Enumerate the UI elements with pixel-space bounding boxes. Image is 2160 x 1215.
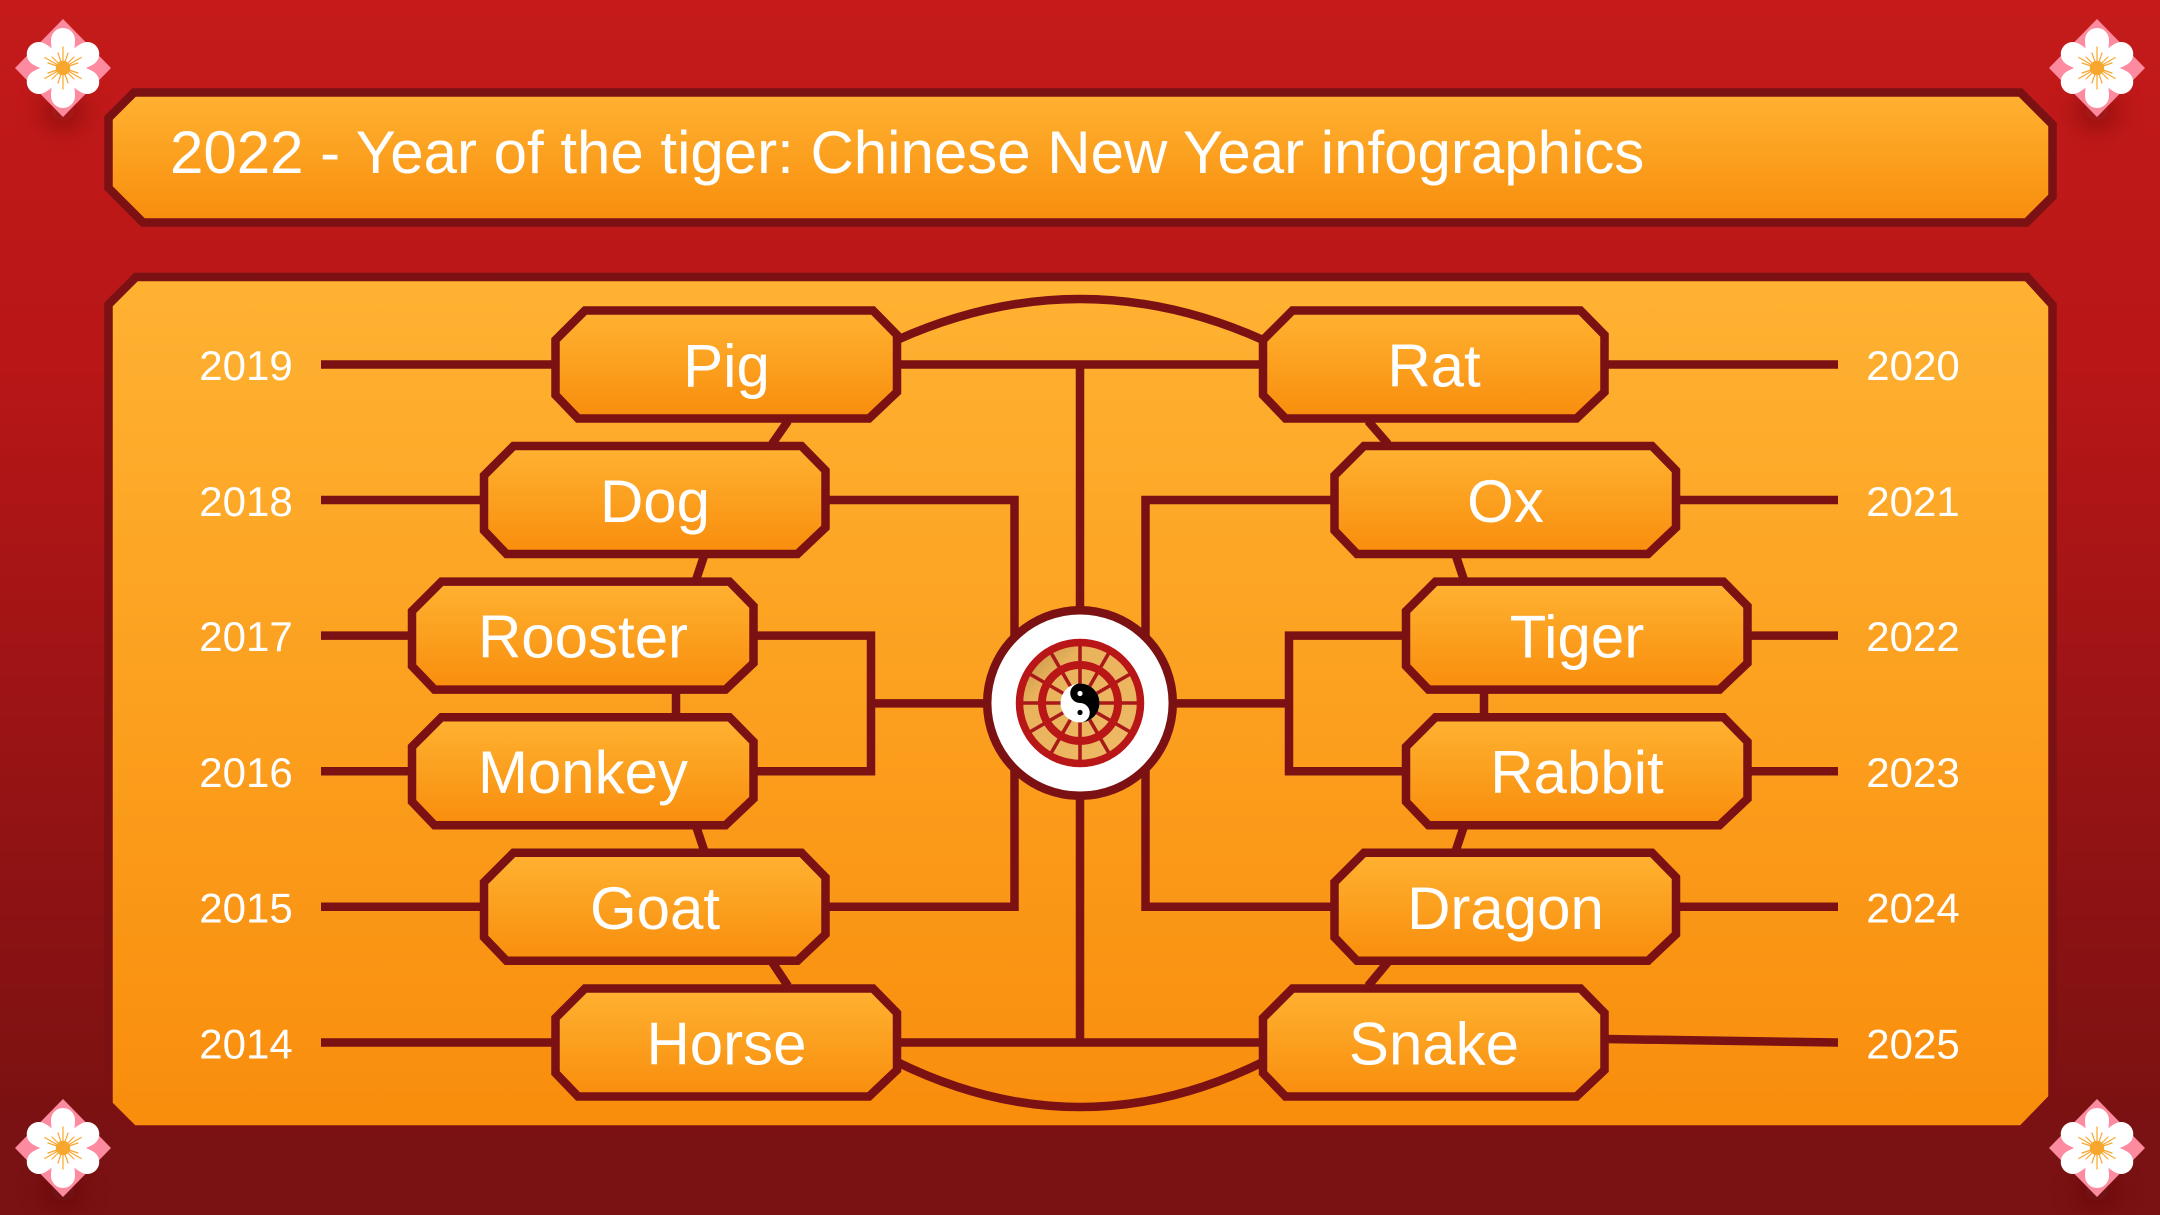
node: Dragon [1334,853,1676,961]
node: Dog: Dog [600,468,710,535]
node: Horse: Horse [646,1010,807,1078]
node: Horse [556,988,897,1096]
node: Rat [1263,310,1604,418]
node: Tiger [1406,582,1748,690]
node: Ox [1334,446,1676,554]
main panel [108,277,2052,1130]
node: Ox: Ox [1467,468,1544,535]
node: Snake [1263,988,1604,1096]
year labels: right [1866,342,1960,1068]
year labels: right: 2022 [1866,613,1960,660]
year labels: left [199,342,293,1068]
node: Rat: Rat [1387,332,1481,400]
year labels: left: 2018 [199,478,293,525]
year labels: right: 2021 [1866,478,1960,525]
title banner: 2022 - Year of the tiger: Chinese New Year infographics [170,119,1644,186]
node: Snake: Snake [1349,1010,1519,1078]
year labels: left: 2016 [199,749,293,796]
node: Goat: Goat [590,875,720,942]
node: Rabbit: Rabbit [1490,739,1664,806]
flower: top right [2049,19,2145,130]
node: Pig: Pig [683,332,770,400]
year labels: left: 2017 [199,613,293,660]
year labels: left: 2014 [199,1020,293,1068]
center medallion [987,610,1173,796]
node: Dragon: Dragon [1407,875,1604,942]
node: Rabbit [1406,717,1748,825]
year labels: left: 2019 [199,342,293,389]
flower: top left [15,19,111,130]
node: Monkey: Monkey [478,739,688,806]
year labels: right: 2025 [1866,1020,1960,1068]
year labels: right: 2020 [1866,342,1960,389]
year labels: right: 2024 [1866,884,1960,932]
node: Rooster [412,582,754,690]
flower: bottom left [15,1099,111,1210]
node: Tiger: Tiger [1510,604,1644,671]
node: Rooster: Rooster [478,604,688,671]
connector lines [321,299,1838,1107]
node: Pig [556,310,897,418]
year labels: right: 2023 [1866,749,1960,796]
flower: bottom right [2049,1099,2145,1210]
title banner [108,92,2052,222]
node: Goat [484,853,826,961]
node: Dog [484,446,826,554]
year labels: left: 2015 [199,884,293,932]
node: Monkey [412,717,754,825]
